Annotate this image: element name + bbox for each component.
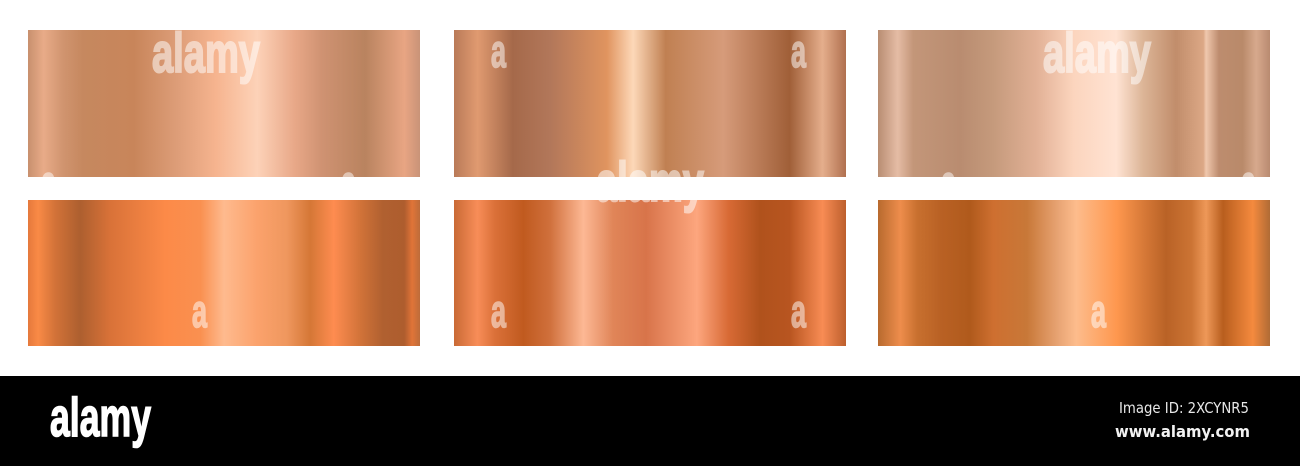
watermarks: a xyxy=(491,25,506,77)
swatch: dark copper, top centre xyxy=(454,30,846,177)
footer logo: alamy xyxy=(50,386,151,448)
swatch: pale rose copper, top right xyxy=(878,30,1270,177)
watermarks: a xyxy=(941,156,956,208)
watermarks: alamy xyxy=(596,150,704,213)
watermarks: a xyxy=(192,285,207,337)
swatch: bright orange copper, bottom left xyxy=(28,200,420,346)
watermarks: alamy xyxy=(152,21,260,84)
watermarks: a xyxy=(791,25,806,77)
watermarks: a xyxy=(41,156,56,208)
swatch: red copper, bottom centre xyxy=(454,200,846,346)
image id: Image ID: 2XCYNR5 xyxy=(1119,399,1249,417)
watermarks: a xyxy=(341,156,356,208)
swatch: rose copper, top left xyxy=(28,30,420,177)
footer bar xyxy=(0,376,1300,466)
watermarks: a xyxy=(791,285,806,337)
swatch: amber copper, bottom right xyxy=(878,200,1270,346)
watermarks: a xyxy=(1241,156,1256,208)
watermarks: a xyxy=(1091,285,1106,337)
website: www.alamy.com xyxy=(1115,422,1250,441)
watermarks: a xyxy=(491,285,506,337)
watermarks xyxy=(41,21,1256,337)
watermarks: alamy xyxy=(1043,21,1151,84)
